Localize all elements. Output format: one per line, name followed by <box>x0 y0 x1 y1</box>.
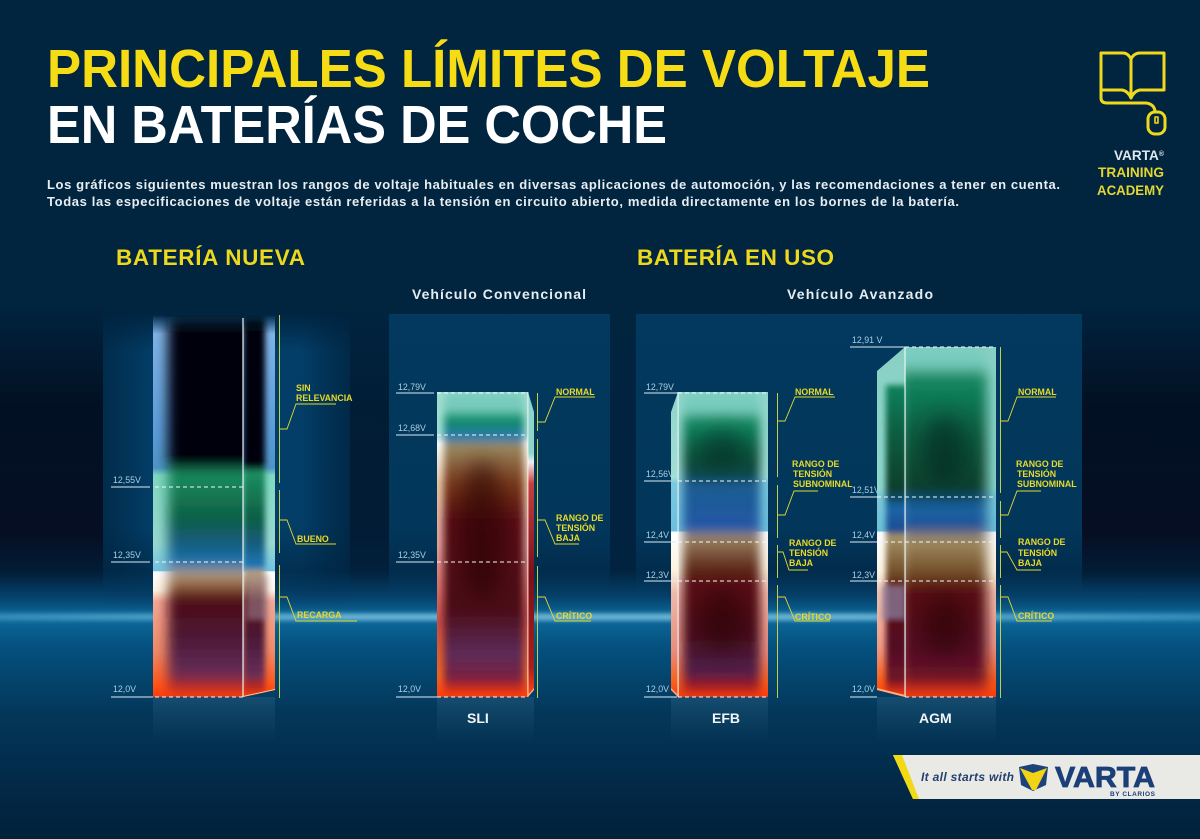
battery reflections <box>153 697 996 742</box>
intro text: Los gráficos siguientes muestran los rangos de voltaje habituales en diversas aplicaciones de automoción, y las recomendaciones a tener en cuenta. <box>47 177 1060 192</box>
voltage ticks: 12,0V <box>852 684 875 694</box>
voltage ticks: 12,79V <box>646 382 674 392</box>
range labels: TENSIÓN <box>793 468 832 479</box>
battery body <box>153 315 275 697</box>
voltage ticks: 12,4V <box>852 530 875 540</box>
range labels: TENSIÓN <box>1017 468 1056 479</box>
voltage ticks: 12,0V <box>398 684 421 694</box>
range labels: NORMAL <box>795 387 834 397</box>
range labels: CRÍTICO <box>795 612 831 622</box>
range labels: TENSIÓN <box>556 522 595 533</box>
panel: conventional vehicle backdrop <box>389 314 610 599</box>
academy label: VARTA <box>1114 148 1159 163</box>
range labels: TENSIÓN <box>1018 547 1057 558</box>
heading: vehículo convencional: Vehículo Convencional <box>412 286 586 302</box>
voltage ticks <box>644 382 768 697</box>
voltage ticks: 12,0V <box>113 684 136 694</box>
range labels <box>1000 347 1077 698</box>
voltage ticks: 12,56V <box>646 469 674 479</box>
range labels <box>778 387 853 698</box>
voltage ticks: 12,79V <box>398 382 426 392</box>
icon: varta logo shield <box>1019 764 1048 791</box>
range labels: RELEVANCIA <box>296 393 353 403</box>
range labels <box>280 315 357 698</box>
voltage ticks: 12,91 V <box>852 335 882 345</box>
chart: batería nueva <box>111 315 357 698</box>
intro text: Todas las especificaciones de voltaje están referidas a la tensión en circuito abierto, medida directamente en los bornes de la batería. <box>47 194 959 209</box>
title <box>47 39 930 155</box>
academy label <box>1097 148 1165 198</box>
battery body <box>877 347 996 697</box>
range labels: NORMAL <box>1018 387 1057 397</box>
chart: EFB <box>644 382 853 726</box>
range labels: SIN <box>296 383 311 393</box>
intro text <box>47 177 1060 209</box>
voltage ticks: 12,4V <box>646 530 669 540</box>
icon: book and mouse <box>1101 53 1165 134</box>
voltage ticks: 12,0V <box>646 684 669 694</box>
range labels: RANGO DE <box>1016 459 1064 469</box>
range labels: RANGO DE <box>789 538 837 548</box>
range labels: BAJA <box>556 533 581 543</box>
academy label: ® <box>1159 150 1165 158</box>
battery body <box>671 392 768 697</box>
range labels: RANGO DE <box>556 513 604 523</box>
battery name: SLI <box>467 710 489 726</box>
range labels: TENSIÓN <box>789 547 828 558</box>
range labels <box>538 387 604 698</box>
voltage ticks: 12,55V <box>113 475 141 485</box>
range labels: CRÍTICO <box>1018 611 1054 621</box>
panel: advanced vehicle backdrop <box>636 314 1082 599</box>
voltage ticks: 12,3V <box>852 570 875 580</box>
range labels: NORMAL <box>556 387 595 397</box>
voltage ticks: 12,35V <box>398 550 426 560</box>
voltage ticks <box>111 475 243 697</box>
chart: SLI <box>396 382 604 726</box>
slogan: It all starts with <box>921 770 1014 784</box>
voltage ticks <box>396 382 528 697</box>
chart: AGM <box>850 335 1077 726</box>
range labels: RECARGA <box>297 610 342 620</box>
range labels: SUBNOMINAL <box>1017 479 1077 489</box>
voltage ticks: 12,51V <box>852 485 880 495</box>
battery name: EFB <box>712 710 740 726</box>
voltage ticks: 12,35V <box>113 550 141 560</box>
yellow accent <box>893 755 919 799</box>
battery body <box>437 392 534 697</box>
range labels: RANGO DE <box>792 459 840 469</box>
battery name: AGM <box>919 710 952 726</box>
range labels: BUENO <box>297 534 329 544</box>
voltage ticks: 12,68V <box>398 423 426 433</box>
heading: vehículo avanzado: Vehículo Avanzado <box>787 286 933 302</box>
range labels: SUBNOMINAL <box>793 479 853 489</box>
by clarios: BY CLARIOS <box>1110 791 1156 798</box>
title: PRINCIPALES LÍMITES DE VOLTAJE <box>47 39 930 99</box>
footer brand banner <box>893 755 1200 799</box>
range labels: CRÍTICO <box>556 611 592 621</box>
academy label: TRAINING <box>1098 165 1164 180</box>
range labels: RANGO DE <box>1018 537 1066 547</box>
heading: batería nueva: BATERÍA NUEVA <box>116 245 305 270</box>
voltage ticks: 12,3V <box>646 570 669 580</box>
range labels: BAJA <box>1018 558 1043 568</box>
range labels: BAJA <box>789 558 814 568</box>
voltage ticks <box>850 335 996 697</box>
panel: battery new backdrop <box>103 319 350 581</box>
heading: batería en uso: BATERÍA EN USO <box>637 245 834 270</box>
varta wordmark: VARTA <box>1055 762 1155 794</box>
title: EN BATERÍAS DE COCHE <box>47 95 667 155</box>
academy label: ACADEMY <box>1097 183 1164 198</box>
horizon glow <box>0 614 1200 620</box>
